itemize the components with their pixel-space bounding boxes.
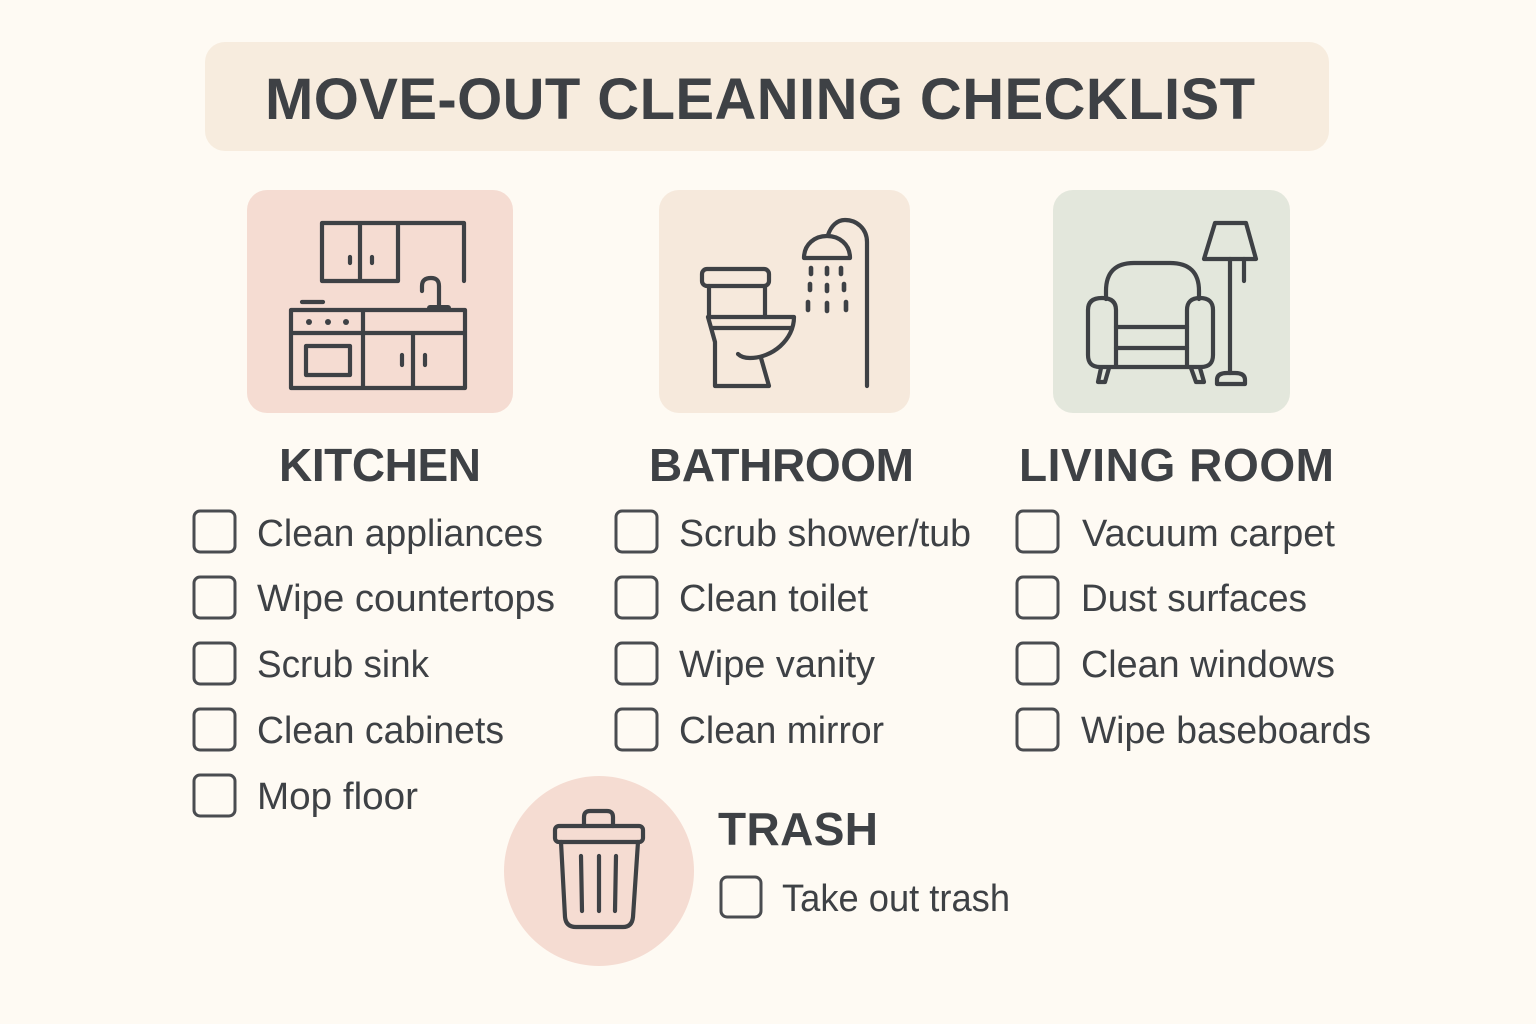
bathroom checklist: Clean toilet: [679, 578, 868, 620]
kitchen checklist: Mop floor: [257, 776, 418, 818]
trash checklist: Take out trash: [782, 878, 1010, 920]
living room checklist: [1017, 511, 1371, 752]
panel: bathroom: [616, 190, 971, 752]
title banner: MOVE-OUT CLEANING CHECKLIST: [265, 67, 1255, 132]
trash icon: [504, 776, 694, 966]
trash heading: TRASH: [718, 803, 878, 855]
bathroom heading: BATHROOM: [649, 439, 914, 491]
kitchen heading: KITCHEN: [279, 439, 481, 491]
kitchen icon: [247, 190, 513, 413]
living room checklist: Wipe baseboards: [1081, 710, 1371, 752]
bathroom checklist: Scrub shower/tub: [679, 513, 971, 555]
kitchen checklist: Clean cabinets: [257, 710, 504, 752]
kitchen checklist: Wipe countertops: [257, 578, 555, 620]
panel: living room: [1017, 190, 1371, 752]
kitchen checklist: [194, 511, 555, 818]
living room checklist: Dust surfaces: [1081, 578, 1307, 620]
kitchen checklist: Scrub sink: [257, 644, 430, 686]
living room checklist: Clean windows: [1081, 644, 1335, 686]
living room heading: LIVING ROOM: [1019, 439, 1334, 491]
kitchen checklist: Clean appliances: [257, 513, 543, 555]
bathroom checklist: Wipe vanity: [679, 644, 875, 686]
bathroom checklist: [616, 511, 971, 752]
panel: trash: [504, 776, 1010, 966]
panel: kitchen: [194, 190, 555, 818]
bathroom checklist: Clean mirror: [679, 710, 884, 752]
living room checklist: Vacuum carpet: [1082, 513, 1335, 555]
bathroom icon: [659, 190, 910, 413]
living room icon: [1053, 190, 1290, 413]
title banner: [205, 42, 1329, 151]
